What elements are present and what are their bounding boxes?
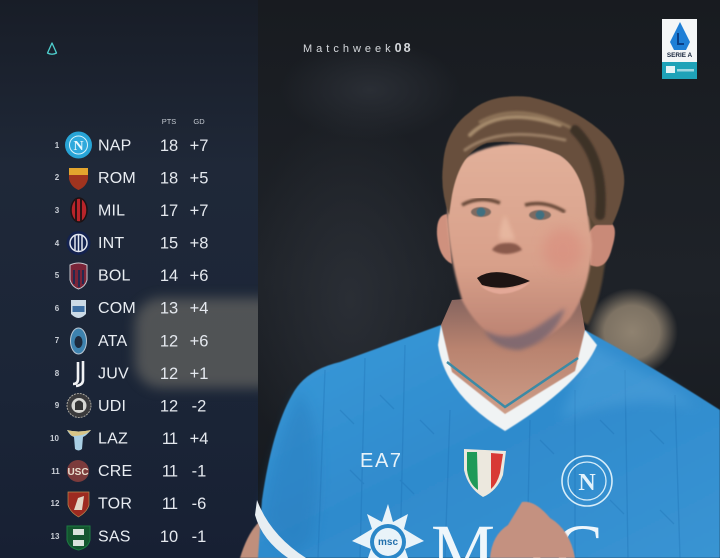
row 10 LAZ: LAZ <box>98 430 128 448</box>
badge: Italian scudetto <box>464 449 506 497</box>
row 13 SAS: 13 <box>51 532 60 541</box>
row 12 TOR <box>51 492 206 517</box>
row 2 ROM: ROM <box>98 170 136 187</box>
blurred light behind panel <box>135 298 285 388</box>
row 2 ROM: 18 <box>160 170 178 188</box>
row 2 ROM: 2 <box>55 173 60 182</box>
row 9 UDI: UDI <box>98 398 126 415</box>
mouth <box>477 272 530 288</box>
icon: brand mark <box>48 43 56 54</box>
row 11 CRE: 11 <box>162 462 178 480</box>
row 5 BOL: 5 <box>55 271 60 280</box>
row 1 NAP: NAP <box>98 138 132 154</box>
neck <box>441 290 585 420</box>
row 7 ATA: 7 <box>55 336 60 345</box>
logo: Serie A: SERIE A <box>667 52 693 59</box>
logo: Serie A <box>662 19 697 79</box>
row 3 MIL: MIL <box>98 202 125 220</box>
row 1 NAP: +7 <box>190 137 208 155</box>
row 1 NAP: 1 <box>55 141 60 150</box>
badge: Napoli crest <box>562 456 612 506</box>
row 13 SAS: 10 <box>160 528 178 546</box>
blurred stadium lights <box>240 40 678 490</box>
player <box>240 96 720 558</box>
ear right <box>588 222 615 267</box>
row 12 TOR: 12 <box>51 499 60 508</box>
table header: GD <box>193 117 205 126</box>
row 3 MIL: +7 <box>190 202 208 220</box>
badge: Napoli crest: N <box>578 470 596 496</box>
row 5 BOL <box>55 263 208 289</box>
row 3 MIL <box>55 198 208 222</box>
row 8 JUV <box>55 361 208 386</box>
row 7 ATA: +6 <box>190 332 208 350</box>
sleeve cuff <box>255 500 306 558</box>
row 12 TOR: TOR <box>98 496 132 512</box>
collar <box>438 325 597 431</box>
row 11 CRE: USC <box>67 467 89 478</box>
row 5 BOL: BOL <box>98 268 131 284</box>
row 5 BOL: 14 <box>160 267 178 285</box>
row 10 LAZ: 11 <box>162 430 178 448</box>
sponsor: MSC star: msc <box>378 537 398 548</box>
cheek blush <box>543 228 583 272</box>
jersey shading <box>318 345 680 558</box>
row 13 SAS: -1 <box>192 528 206 546</box>
row 6 COM: COM <box>98 300 136 317</box>
row 11 CRE: -1 <box>192 462 206 480</box>
row 8 JUV: 8 <box>55 369 60 378</box>
heading: matchweek: Matchweek08 <box>303 41 413 55</box>
row 13 SAS: SAS <box>98 528 131 546</box>
row 1 NAP: N <box>73 139 84 154</box>
row 4 INT: +8 <box>190 234 208 252</box>
row 11 CRE <box>51 460 206 482</box>
brows <box>462 199 565 212</box>
hair <box>442 96 624 225</box>
row 2 ROM <box>55 168 208 190</box>
ear left <box>437 214 452 264</box>
row 3 MIL: 17 <box>160 202 178 220</box>
row 4 INT: INT <box>98 235 124 252</box>
row 8 JUV: +1 <box>190 365 208 383</box>
panel: standings background <box>0 0 258 558</box>
beard shadow <box>484 308 565 350</box>
row 6 COM: +4 <box>190 300 208 318</box>
row 7 ATA: 12 <box>160 332 178 350</box>
row 4 INT <box>55 231 208 255</box>
row 8 JUV: JUV <box>98 366 129 382</box>
arm <box>240 515 295 558</box>
row 9 UDI <box>55 394 206 418</box>
row 6 COM: 13 <box>160 300 178 318</box>
row 8 JUV: 12 <box>160 365 178 383</box>
hair back <box>577 200 606 325</box>
sponsor: MSC star <box>352 504 424 558</box>
row 9 UDI: 9 <box>55 401 60 410</box>
table header <box>162 117 205 126</box>
row 10 LAZ <box>50 430 208 450</box>
row 13 SAS <box>51 526 206 550</box>
row 1 NAP <box>55 132 208 158</box>
row 12 TOR: -6 <box>192 495 206 513</box>
row 9 UDI: 12 <box>160 398 178 416</box>
row 6 COM <box>55 300 208 318</box>
row 11 CRE: CRE <box>98 463 132 480</box>
row 5 BOL: +6 <box>190 267 208 285</box>
row 12 TOR: 11 <box>162 495 178 513</box>
nose <box>492 243 522 254</box>
row 9 UDI: -2 <box>192 398 206 416</box>
eyes <box>471 207 551 220</box>
badge: EA7: EA7 <box>360 450 403 472</box>
row 6 COM: 6 <box>55 304 60 313</box>
row 10 LAZ: 10 <box>50 434 59 443</box>
row 7 ATA <box>55 328 208 354</box>
hand <box>490 502 575 558</box>
row 10 LAZ: +4 <box>190 430 208 448</box>
row 11 CRE: 11 <box>51 467 60 476</box>
row 7 ATA: ATA <box>98 333 127 350</box>
table header: PTS <box>162 117 176 126</box>
row 4 INT: 15 <box>160 234 178 252</box>
face <box>447 144 592 346</box>
row 2 ROM: +5 <box>190 170 208 188</box>
row 1 NAP: 18 <box>160 137 178 155</box>
row 4 INT: 4 <box>55 239 60 248</box>
jersey <box>258 325 720 558</box>
row 3 MIL: 3 <box>55 206 60 215</box>
